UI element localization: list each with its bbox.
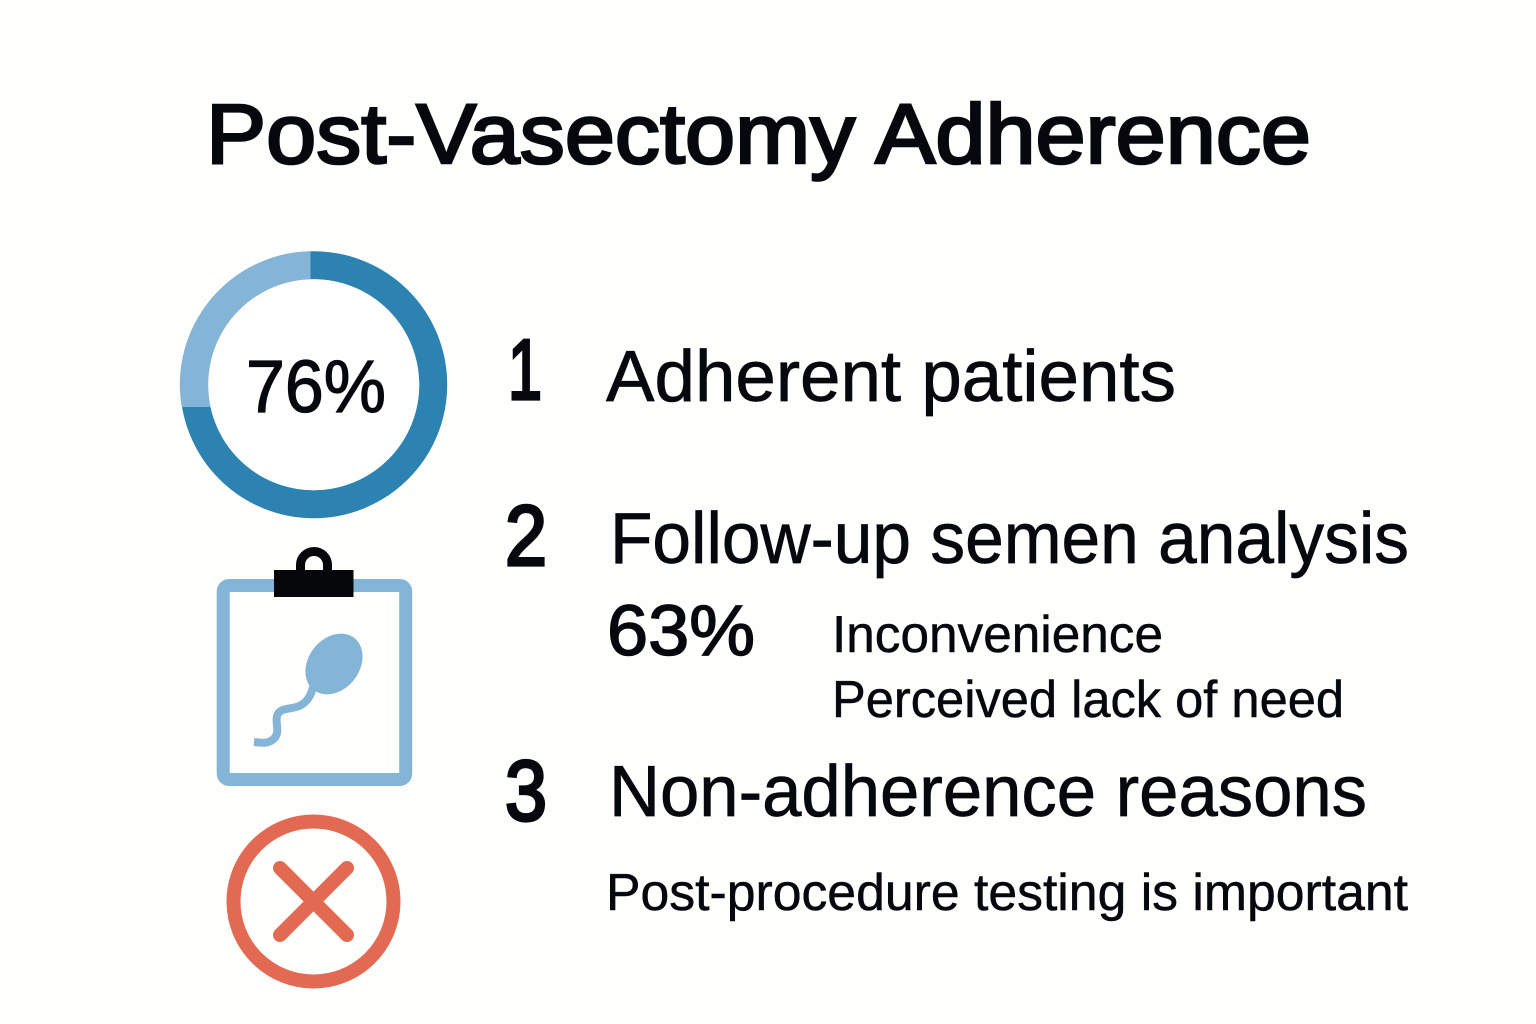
number 1: 1 [508, 323, 542, 418]
reason: perceived lack of need: Perceived lack of need [832, 671, 1344, 729]
heading 3: Non-adherence reasons [609, 752, 1367, 832]
donut chart: 76% [180, 251, 433, 504]
clipboard frame [223, 586, 406, 780]
item 3: non-adherence reasons [505, 744, 1367, 839]
closing note: Post-procedure testing is important [606, 864, 1409, 922]
number 3: 3 [505, 744, 547, 839]
donut value: 76% [246, 345, 386, 428]
heading 1: Adherent patients [606, 337, 1176, 417]
title: Post-Vasectomy Adherence [206, 87, 1311, 181]
item 2: follow-up semen analysis [505, 489, 1409, 729]
icon: clipboard with sperm [223, 552, 406, 780]
donut light segment [180, 251, 310, 407]
stat 63%: 63% [607, 592, 755, 671]
sperm icon [254, 622, 374, 743]
donut track: dark segment [194, 265, 433, 504]
item 1: adherent patients [508, 323, 1176, 418]
donut hole [208, 279, 419, 490]
reason: inconvenience: Inconvenience [832, 606, 1163, 664]
clipboard clip [274, 552, 354, 597]
icon: red cross in circle [234, 822, 394, 982]
number 2: 2 [505, 489, 547, 584]
heading 2: Follow-up semen analysis [610, 499, 1409, 579]
